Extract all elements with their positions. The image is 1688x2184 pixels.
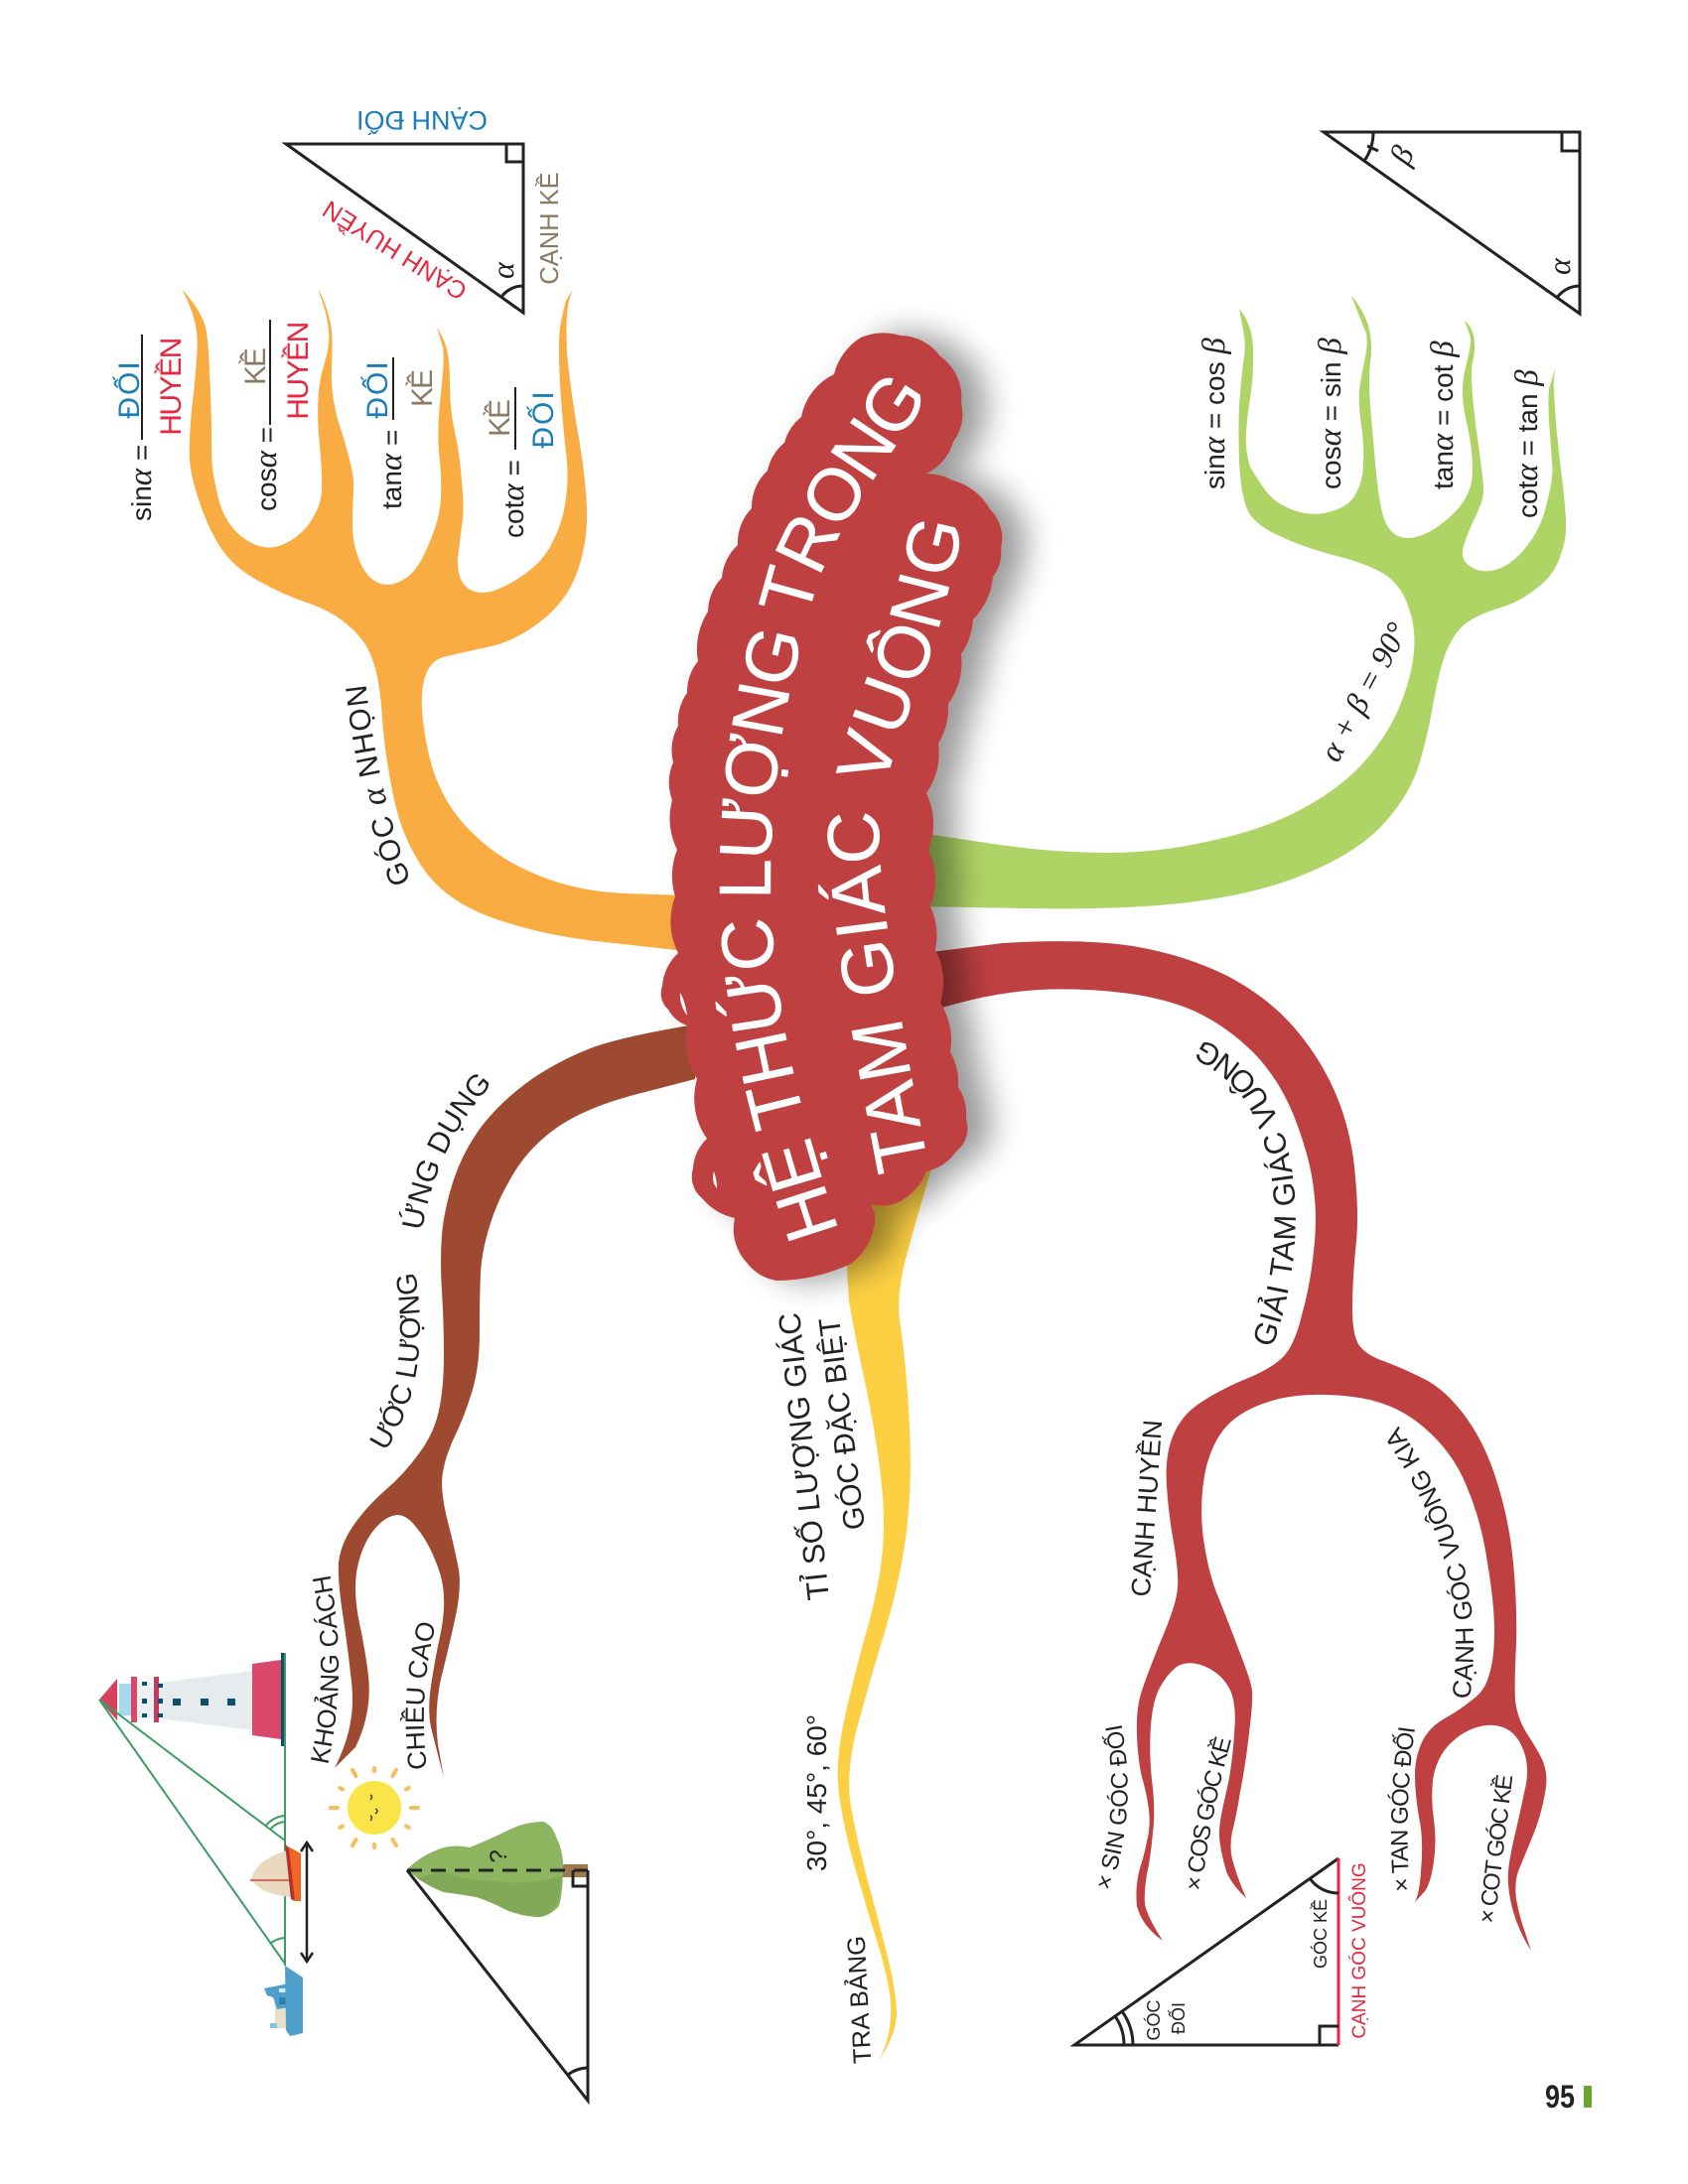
illustration: sailboat: [250, 1843, 301, 1901]
triangle: solving diagram: [1074, 1858, 1370, 2045]
formula: cos alpha: cosα =: [248, 427, 284, 511]
label: cot adjacent: × COT GÓC KỀ: [1481, 1775, 1513, 1922]
branch: orange acute angle: [182, 289, 685, 951]
formula: sin alpha: sinα =: [123, 445, 159, 521]
page number: 95: [1545, 2080, 1575, 2116]
title: HỆ THỨC LƯỢNG TRONG: [715, 377, 921, 1241]
blob slivers: [680, 993, 717, 1188]
formula: cot alpha equals tan beta: cotα = tan β: [1509, 369, 1545, 518]
formula: tan alpha equals cot beta: tanα = cot β: [1425, 341, 1461, 489]
triangle: solving diagram: GÓC KỀ: [1310, 1899, 1331, 1969]
illustration: tree: [407, 1822, 588, 1917]
triangle: sides definition: [286, 105, 564, 313]
triangle: sides definition: CẠNH KỀ: [535, 172, 564, 285]
formula: sin alpha: ĐỐI: [112, 359, 146, 419]
label: applications: ỨNG DỤNG: [399, 1074, 489, 1227]
formula: cos alpha: HUYỀN: [281, 323, 315, 420]
formula: cot alpha: KỀ: [483, 400, 516, 437]
illustration: tree: ?: [486, 1849, 512, 1863]
label: look up table: TRA BẢNG: [841, 1935, 877, 2065]
label: trig ratios of special angles: GÓC ĐẶC BIỆT: [813, 1315, 872, 1532]
branch: green complementary angles: [914, 296, 1566, 908]
label: acute angle: GÓC α NHỌN: [346, 687, 408, 885]
triangle: alpha beta: [1324, 132, 1580, 314]
label: alpha plus beta: α + β = 90°: [1313, 616, 1415, 767]
illustration: sun: [331, 1768, 418, 1847]
label: solving right triangles: GIẢI TAM GIÁC VUÔNG: [1196, 1042, 1296, 1344]
formula: cot alpha: [483, 387, 560, 538]
branch: brown applications: [335, 1024, 695, 1778]
formula: sin alpha: HUYỀN: [154, 339, 188, 436]
arrow: distance between boats: [301, 1843, 313, 1962]
label: height: CHIỀU CAO: [400, 1622, 435, 1769]
page number: [1545, 2080, 1592, 2116]
branch: red solving right triangles: [923, 941, 1546, 1951]
formula: tan alpha: ĐỐI: [360, 359, 394, 419]
formula: tan alpha: [360, 357, 439, 509]
formula: cos alpha equals sin beta: cosα = sin β: [1313, 338, 1348, 489]
label: trig ratios of special angles: [771, 1311, 872, 1602]
label: other leg: CẠNH GÓC VUÔNG KIA: [1387, 1426, 1477, 1698]
illustration: ship: [264, 1966, 303, 2036]
formula: tan alpha: KỀ: [405, 370, 439, 407]
illustration: lighthouse: [99, 1653, 285, 1746]
formula: cot alpha: cotα =: [495, 460, 531, 538]
formula: tan alpha: tanα =: [373, 430, 409, 509]
label: trig ratios of special angles: TỈ SỐ LƯỢNG GIÁC: [771, 1311, 836, 1602]
formula: sin alpha equals cos beta: sinα = cos β: [1196, 338, 1232, 489]
label: estimation: ƯỚC LƯỢNG: [369, 1275, 425, 1447]
triangle: alpha beta: α: [1541, 257, 1577, 275]
triangle: solving diagram: ĐỐI: [1168, 2002, 1189, 2034]
triangle: sides definition: CẠNH HUYỀN: [318, 195, 472, 306]
title: TAM GIÁC VUÔNG: [818, 521, 959, 1175]
formula: cos alpha: KỀ: [238, 348, 272, 385]
triangle: sides definition: CẠNH ĐỐI: [356, 105, 488, 137]
triangle: tree height: [407, 1870, 588, 2101]
label: sin opposite: × SIN GÓC ĐỐI: [1098, 1725, 1128, 1888]
label: tan opposite: × TAN GÓC ĐỐI: [1388, 1727, 1415, 1890]
label: distance: KHOẢNG CÁCH: [311, 1576, 340, 1763]
branch: yellow special angles: [838, 1161, 933, 2061]
central title blob: [661, 333, 1002, 1281]
formula: cos alpha: [238, 320, 315, 511]
triangle: solving diagram: CẠNH GÓC VUÔNG: [1348, 1862, 1370, 2039]
illustration: sight lines: [99, 1653, 285, 1966]
triangle: sides definition: α: [485, 261, 520, 279]
formula: cot alpha: ĐỐI: [526, 389, 560, 449]
triangle: solving diagram: GÓC: [1143, 1999, 1164, 2041]
triangle: alpha beta: β: [1381, 140, 1421, 171]
label: special angle values: 30°, 45°, 60°: [801, 1714, 832, 1871]
formula: sin alpha: [112, 335, 188, 521]
label: cos adjacent: × COS GÓC KỀ: [1188, 1736, 1231, 1889]
label: hypotenuse: CẠNH HUYỀN: [1125, 1419, 1168, 1597]
